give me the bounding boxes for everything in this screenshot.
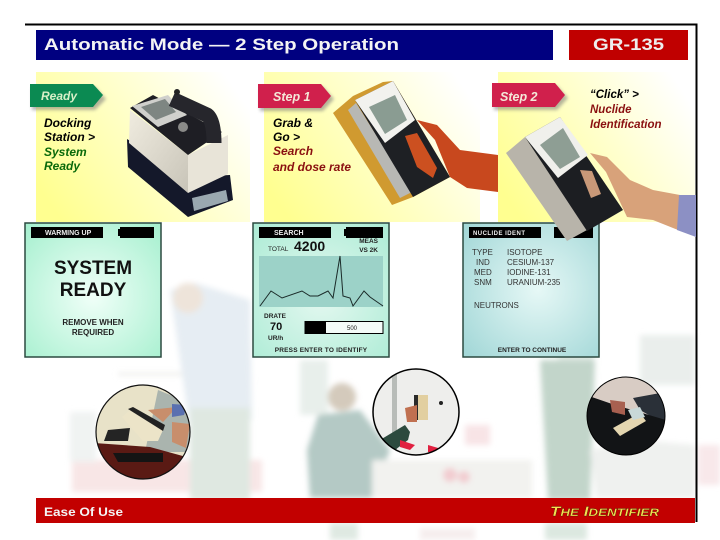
- screen: nuclide identification: IND: [476, 258, 490, 267]
- circle photo: scanning a truck: [373, 368, 459, 458]
- screen: nuclide identification: [463, 223, 599, 357]
- screen: nuclide identification: NEUTRONS: [474, 301, 519, 310]
- screen: system ready: SYSTEM: [54, 258, 132, 279]
- panel: ready: [30, 72, 250, 222]
- screen: search: MEAS: [359, 238, 379, 245]
- screen: nuclide identification: URANIUM-235: [507, 278, 561, 287]
- dose rate bar: 500: [347, 326, 358, 332]
- screen: system ready: REQUIRED: [72, 328, 114, 337]
- icon: hand holding grey device: [506, 117, 696, 241]
- icon: hand holding device in orange case: [333, 81, 498, 205]
- screen: search: VS 2K: [359, 247, 378, 254]
- screen: system ready: WARMING UP: [45, 230, 92, 237]
- screen: nuclide identification: MED: [474, 268, 492, 277]
- model badge: GR-135: [593, 35, 664, 54]
- circle photo: docking at desk: [95, 385, 195, 482]
- text: click for nuclide identification: Nuclide: [590, 104, 632, 116]
- icon: docking station device: [127, 89, 233, 217]
- footer: ease of use: Ease Of Use: [44, 505, 123, 519]
- faded background photos: [70, 283, 720, 540]
- footer: the identifier: THE IDENTIFIER: [550, 503, 659, 519]
- text: grab and go: Grab &: [273, 116, 313, 130]
- ribbon: ready: Ready: [41, 89, 78, 103]
- text: docking station: Docking: [44, 116, 91, 130]
- screen: nuclide identification: ENTER TO CONTINUE: [498, 347, 567, 354]
- screen: search: 4200: [294, 238, 325, 254]
- text: docking station: Station >: [44, 130, 95, 144]
- circle photo: inspecting a car: [586, 377, 666, 460]
- screen: nuclide identification: SNM: [474, 278, 492, 287]
- screen: system ready: [25, 223, 161, 357]
- model badge: [569, 30, 688, 60]
- screen: search: DRATE: [264, 313, 287, 320]
- screen: system ready: REMOVE WHEN: [62, 318, 124, 327]
- ribbon: step 2: [492, 83, 568, 110]
- title bar: [36, 30, 553, 60]
- text: docking station: System: [44, 145, 87, 159]
- line chart: [259, 256, 383, 307]
- screen: search: [253, 223, 389, 357]
- text: grab and go: Search: [273, 144, 313, 158]
- screen: search: UR/h: [268, 335, 283, 342]
- text: grab and go: Go >: [273, 130, 300, 144]
- screen: search: 70: [270, 321, 282, 333]
- screen: nuclide identification: NUCLIDE IDENT: [473, 231, 525, 237]
- screen: search: PRESS ENTER TO IDENTIFY: [275, 347, 368, 354]
- text: docking station: Ready: [44, 159, 81, 173]
- ribbon: step 1: Step 1: [273, 90, 311, 104]
- title bar: Automatic Mode — 2 Step Operation: [44, 35, 399, 54]
- ribbon: ready: [30, 84, 106, 110]
- text: click for nuclide identification: “Click” >: [590, 89, 639, 101]
- text: click for nuclide identification: Identification: [590, 119, 662, 131]
- footer bar: [36, 498, 695, 523]
- panel: step 1: [258, 72, 498, 222]
- screen: nuclide identification: CESIUM-137: [507, 258, 555, 267]
- screen: nuclide identification: IODINE-131: [507, 268, 551, 277]
- screen: nuclide identification: TYPE: [472, 248, 493, 257]
- ribbon: step 2: Step 2: [500, 90, 538, 104]
- panel: step 2: [492, 72, 695, 222]
- screen: nuclide identification: ISOTOPE: [507, 248, 542, 257]
- text: grab and go: and dose rate: [273, 160, 351, 174]
- ribbon: step 1: [258, 84, 334, 111]
- screen: search: SEARCH: [274, 230, 304, 237]
- screen: search: TOTAL: [268, 246, 289, 253]
- screen: system ready: READY: [60, 280, 127, 301]
